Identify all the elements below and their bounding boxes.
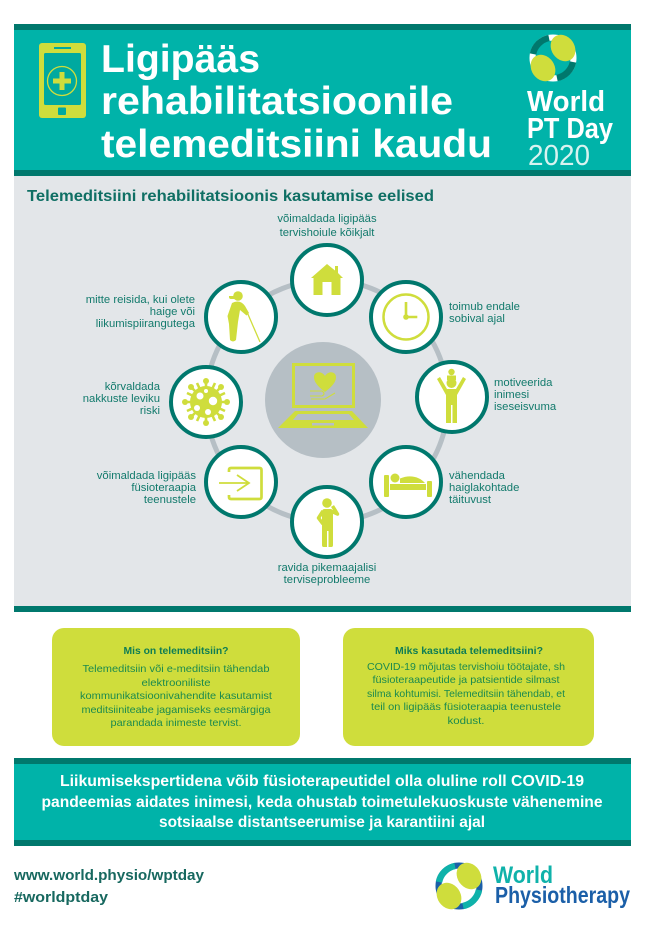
footer links [13, 867, 205, 906]
benefit: motivate independence: iseseisvuma [494, 401, 557, 413]
logo: World Physiotherapy [432, 858, 630, 914]
title [101, 38, 492, 166]
callout: why use telemedicine [343, 628, 594, 746]
benefit: motivate independence: inimesi [494, 389, 529, 401]
callout: why use telemedicine: kodust. [448, 716, 484, 727]
logo: World PT Day 2020: World [527, 86, 605, 118]
benefit: remove infection risk: riski [140, 405, 160, 417]
callout: what is telemedicine [52, 628, 300, 746]
header banner [14, 24, 631, 176]
callout: what is telemedicine: parandada inimeste tervist. [110, 718, 242, 729]
benefit: access to physiotherapy services: füsioteraapia [131, 482, 197, 494]
callout: what is telemedicine: kommunikatsioonivahendite kasutamist [80, 691, 272, 702]
logo: World Physiotherapy: World [493, 862, 553, 889]
benefit: treat long-term conditions: ravida pikemaajalisi [278, 562, 376, 574]
benefit: no travel when ill or with limited mobility: mitte reisida, kui olete [86, 294, 195, 306]
benefit: access to physiotherapy services [97, 447, 276, 517]
footer links: #worldptday [14, 889, 109, 906]
callout: why use telemedicine: füsioteraapeutide ja patsientide silmast [372, 675, 560, 686]
callout: what is telemedicine: meditsiiniteabe jagamiseks eesmärgiga [82, 705, 271, 716]
benefit: no travel when ill or with limited mobility [86, 282, 276, 352]
callout: what is telemedicine: Telemeditsiin või e-meditsiin tähendab [82, 664, 270, 675]
icon: central laptop with heart [265, 342, 381, 458]
benefit: remove infection risk: kõrvaldada [105, 381, 161, 393]
benefit: reduce hospital occupancy: vähendada [449, 470, 506, 482]
benefit: access to physiotherapy services: teenustele [144, 494, 196, 506]
heading: benefits: Telemeditsiini rehabilitatsioonis kasutamise eelised [27, 188, 434, 205]
benefit: access to physiotherapy services: võimaldada ligipääs [97, 470, 196, 482]
title: telemeditsiini kaudu [101, 123, 492, 166]
callout: what is telemedicine: Mis on telemeditsiin? [124, 646, 228, 657]
banner: role of physiotherapists [14, 758, 631, 846]
benefit: access from anywhere: võimaldada ligipääs [277, 213, 377, 225]
benefit: reduce hospital occupancy: täituvust [449, 494, 492, 506]
logo: World PT Day 2020: PT Day [527, 113, 613, 145]
connecting ring [206, 280, 448, 522]
banner: role of physiotherapists: Liikumisekspertidena võib füsioterapeutidel olla oluline roll COVID-19 [60, 773, 584, 790]
benefit: access from anywhere [277, 213, 377, 315]
benefit: at a convenient time [371, 282, 520, 352]
title: Ligipääs [101, 38, 260, 81]
title: rehabilitatsioonile [101, 80, 453, 123]
benefit: motivate independence [417, 362, 557, 432]
callout: why use telemedicine: Miks kasutada telemeditsiini? [395, 646, 543, 657]
footer links: www.world.physio/wptday [13, 867, 205, 884]
callout: why use telemedicine: COVID-19 mõjutas tervishoiu töötajate, sh [367, 662, 565, 673]
callout: why use telemedicine: teil on ligipääs füsioteraapia teenustele [371, 702, 561, 713]
icon: smartphone with medical cross [39, 43, 86, 118]
benefit: remove infection risk [83, 367, 241, 437]
banner: role of physiotherapists: sotsiaalse distantseerumise ja karantiini ajal [159, 814, 485, 831]
panel: benefits of telemedicine [14, 176, 631, 612]
benefit: no travel when ill or with limited mobility: liikumispiirangutega [96, 318, 196, 330]
benefit: at a convenient time: sobival ajal [449, 313, 505, 325]
logo: World PT Day 2020: 2020 [528, 140, 590, 172]
benefit: reduce hospital occupancy [371, 447, 519, 517]
benefit: treat long-term conditions: terviseprobleeme [284, 574, 370, 586]
logo: World PT Day 2020 [526, 30, 613, 172]
banner: role of physiotherapists: pandeemias aidates inimesi, keda ohustab toimetulekuoskuste vähenemine [42, 794, 603, 811]
benefit: reduce hospital occupancy: haiglakohtade [449, 482, 519, 494]
callout: what is telemedicine: elektrooniliste [142, 678, 211, 689]
benefit: at a convenient time: toimub endale [449, 301, 520, 313]
benefit: motivate independence: motiveerida [494, 377, 553, 389]
benefit: no travel when ill or with limited mobility: haige või [150, 306, 195, 318]
benefit: treat long-term conditions [278, 487, 376, 586]
callout: why use telemedicine: silma kohtumisi. Telemeditsiin tähendab, et [367, 689, 565, 700]
benefit: access from anywhere: tervishoiule kõikjalt [280, 227, 375, 239]
benefit: remove infection risk: nakkuste leviku [83, 393, 160, 405]
